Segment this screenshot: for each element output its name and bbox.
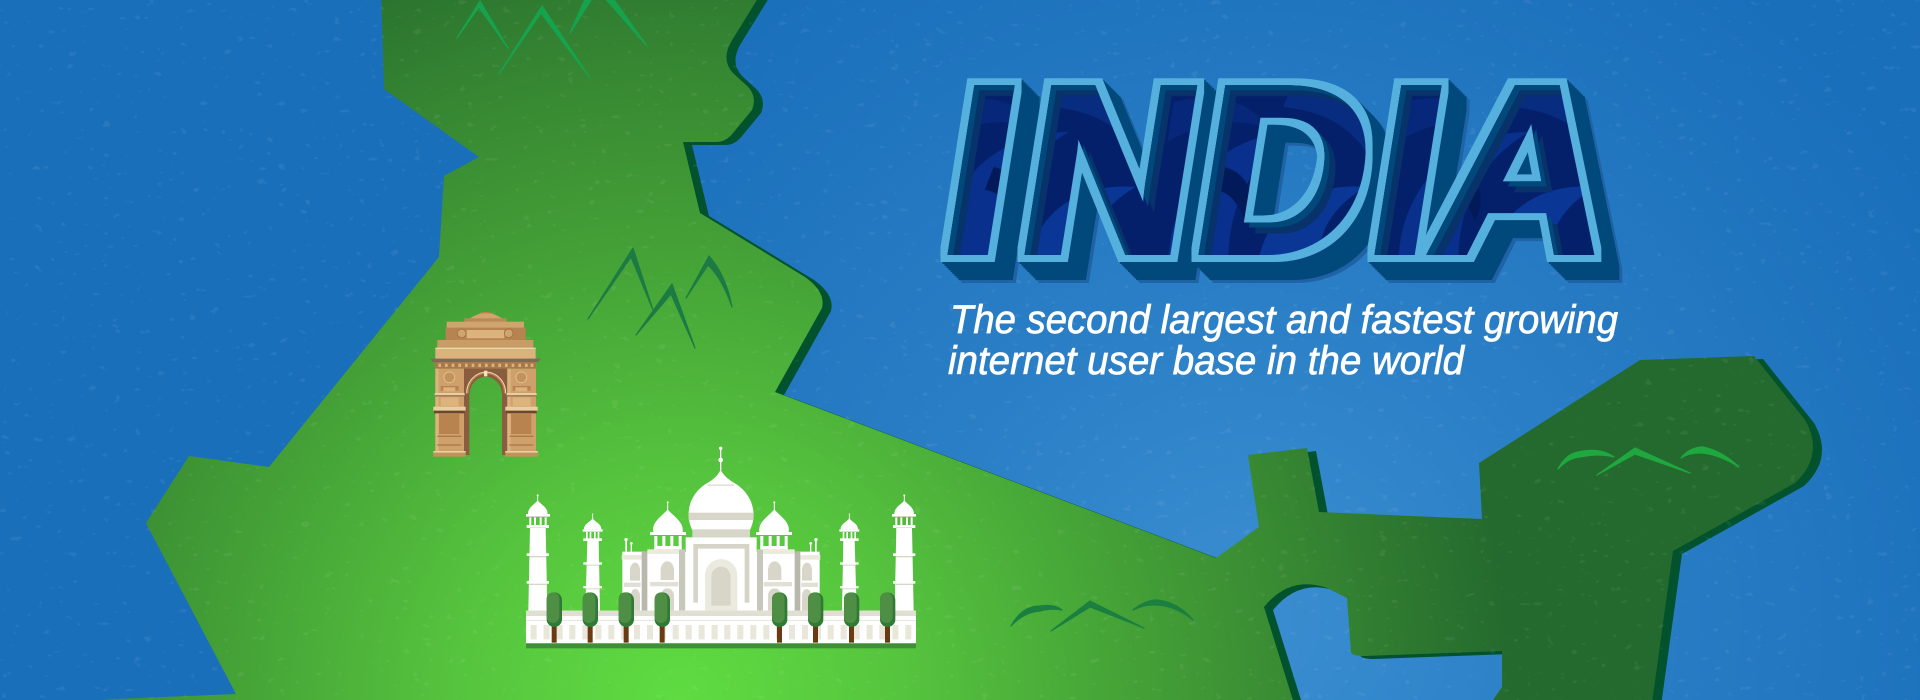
mountains: north-east xyxy=(1558,447,1739,475)
subtitle xyxy=(948,298,1618,383)
minarets xyxy=(526,494,916,611)
mountains: Himalaya north xyxy=(457,0,647,78)
icon: India Gate xyxy=(430,312,541,457)
subtitle: The second largest and fastest growing xyxy=(950,298,1618,342)
main hall xyxy=(686,537,757,611)
title: INDIA xyxy=(927,36,1631,303)
side wings xyxy=(622,501,820,611)
platform xyxy=(526,611,916,648)
central dome xyxy=(689,447,754,537)
mountains: central xyxy=(588,248,732,348)
subtitle: internet user base in the world xyxy=(948,339,1466,383)
mountains: south xyxy=(1011,600,1193,631)
trees xyxy=(547,592,895,643)
icon: Taj Mahal xyxy=(526,447,916,648)
